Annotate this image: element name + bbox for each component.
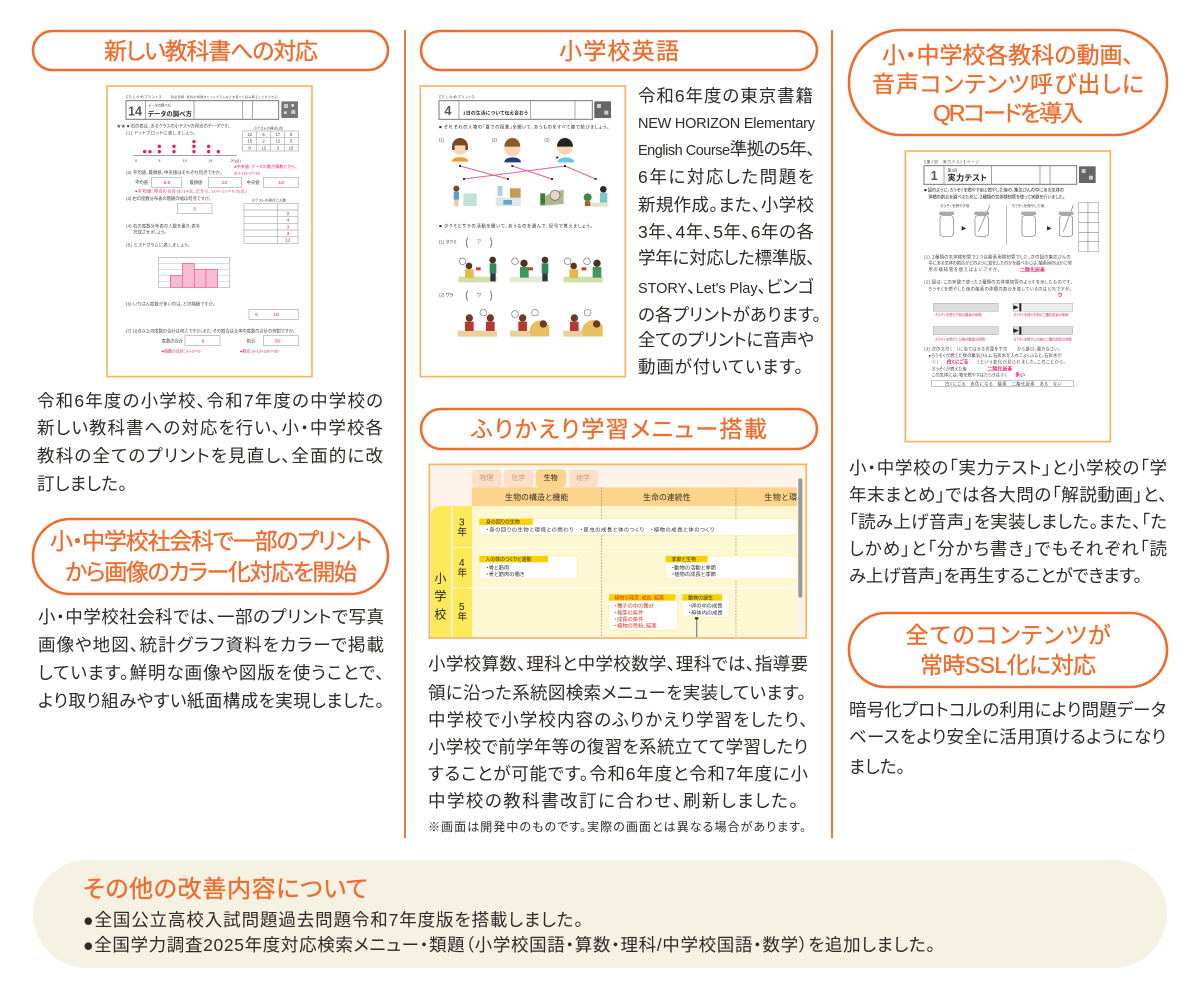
worksheet thumbnail: data reading: 15 — [289, 145, 294, 150]
worksheet thumbnail: achievement test: 白くにごる 赤色になる 酸素 二酸化炭素 ある ない — [945, 380, 1062, 387]
worksheet thumbnail: English: ■ タクミとサラの活動を聞いて、あうものを選んで、記号で答えましょう。 — [439, 222, 592, 229]
body text: video and audio QR: み上げ音声」を再生することができます。 — [849, 566, 1142, 586]
worksheet thumbnail: data reading: 到達目標：資料の特徴をヒストグラムなどを使って読み取ることができる。 — [171, 94, 280, 99]
worksheet thumbnail: data reading: 3 — [287, 231, 290, 237]
heading: video and audio QR: QRコードを導入 — [933, 100, 1083, 126]
worksheet thumbnail: data reading: 12 — [285, 238, 291, 244]
panel title: その他の改善内容について — [83, 876, 368, 903]
body text: new textbooks — [37, 391, 384, 494]
worksheet thumbnail: data reading: ●中央値：データの数が偶数だから、 — [234, 163, 297, 169]
worksheet thumbnail: data reading: 5 — [158, 159, 160, 163]
worksheet thumbnail: English: ア — [476, 239, 481, 245]
worksheet thumbnail: data reading: 17 — [275, 132, 281, 137]
tabs: 物理 — [479, 473, 493, 482]
body text: social studies colour — [38, 607, 384, 711]
worksheet thumbnail: English: ウ — [476, 292, 481, 299]
screenshot: curriculum map menu: ・骨と筋肉の働き — [486, 570, 525, 578]
screenshot: curriculum map menu: ・骨と筋肉 — [486, 563, 509, 571]
body text: English: 令和6年度の東京書籍 — [638, 86, 813, 106]
worksheet thumbnail: data reading: 10 — [278, 180, 284, 186]
worksheet thumbnail: data reading: 最頻値 — [189, 179, 203, 186]
worksheet thumbnail: data reading: 5 — [262, 132, 265, 137]
worksheet thumbnail: achievement test: ①（ — [932, 359, 939, 366]
body text: English: 新規作成。また、小学校 — [638, 195, 814, 215]
worksheet thumbnail: data reading: 3 — [287, 224, 290, 230]
worksheet thumbnail: achievement test: ウ — [1058, 292, 1063, 299]
body text: English: 動画が付いています。 — [638, 357, 803, 377]
heading: always-on SSL: 全てのコンテンツが — [906, 622, 1111, 648]
screenshot: curriculum map menu: ・動物の活動と季節 — [672, 563, 717, 571]
worksheet thumbnail: achievement test: 二酸化炭素 — [1020, 267, 1045, 274]
body text: English: English Course準拠の5年、 — [638, 139, 815, 159]
body text: English: NEW HORIZON Elementary — [638, 116, 816, 132]
worksheet thumbnail: achievement test: 白くにごる — [947, 359, 969, 366]
worksheet thumbnail: English: 4 — [444, 104, 451, 118]
worksheet thumbnail: achievement test: 第1回 — [948, 168, 957, 173]
tabs: 地学 — [576, 473, 590, 482]
tabs: 生物 — [544, 473, 558, 482]
worksheet thumbnail: English: (3) — [544, 137, 550, 142]
screenshot: curriculum map menu: ・成長の条件 — [614, 615, 644, 623]
screenshot: curriculum map menu: 生物と環 — [764, 492, 797, 502]
worksheet thumbnail: achievement test: 用の検知管を使えばよいですか。 — [928, 266, 1000, 273]
screenshot: curriculum map menu: 3 — [459, 517, 465, 528]
worksheet thumbnail: achievement test: ●ろうそくが燃えた後の集気びんに石灰水を入れてよくふると、石灰水が — [928, 352, 1062, 359]
heading: elementary English — [421, 31, 817, 70]
worksheet thumbnail: data reading: (8＋12)÷2＝10 — [234, 171, 261, 176]
worksheet thumbnail: achievement test: 1 — [931, 169, 938, 183]
worksheet thumbnail: achievement test: 多い — [1015, 372, 1025, 379]
body text: review menu: 領に沿った系統図検索メニューを実装しています。 — [428, 683, 806, 703]
worksheet thumbnail: data reading: 15 — [208, 159, 212, 163]
worksheet thumbnail: data reading: 20(点) — [231, 158, 241, 163]
worksheet thumbnail: data reading: 15 — [247, 139, 253, 144]
worksheet thumbnail: achievement test: 【第1回 実力テスト】ページ — [924, 159, 979, 164]
body text: video and audio QR: しかめ」と「分かち書き」でもそれぞれ「読 — [849, 539, 1167, 559]
worksheet thumbnail: data reading: ★★ ■ 右の表は、あるクラスの小テストの得点のデータです。 — [117, 123, 230, 130]
worksheet thumbnail: achievement test: 二酸化炭素 — [987, 365, 1012, 372]
worksheet thumbnail: data reading: 【たしかめプリント】 — [126, 94, 161, 99]
heading: new textbooks: 新しい教科書への対応 — [104, 38, 318, 64]
worksheet thumbnail: data reading: ●度数の合計：3＋3＝6 — [162, 347, 201, 353]
body text: review menu: することが可能です。令和6年度と令和7年度に小 — [428, 764, 808, 784]
worksheet thumbnail: achievement test: この気体には、物を燃やすはたらきは③（ — [931, 372, 1007, 379]
screenshot: curriculum map menu: 年 — [457, 567, 467, 579]
heading: social studies colour: から画像のカラー化対応を開始 — [65, 559, 357, 585]
worksheet thumbnail: achievement test: ろうそくを燃やす前の二酸化炭素の体積 — [1013, 312, 1069, 317]
heading: always-on SSL — [849, 613, 1167, 687]
worksheet thumbnail: data reading: 5 — [193, 206, 196, 212]
worksheet thumbnail: achievement test: 実力テスト — [948, 172, 987, 182]
body text: video and audio QR: 年末まとめ」では各大問の「解説動画」と、 — [849, 485, 1167, 505]
screenshot: curriculum map menu: 年 — [457, 526, 467, 538]
worksheet thumbnail: achievement test: ろうそくが燃えた後 — [931, 365, 968, 372]
body text: review menu — [428, 654, 808, 811]
worksheet thumbnail: data reading: 8 — [290, 132, 293, 137]
worksheet thumbnail: data reading: 9.5 — [163, 180, 170, 186]
worksheet thumbnail: achievement test: ろうそくを燃やした後 — [1011, 203, 1045, 208]
screenshot: curriculum map menu: ・植物の受粉、結実 — [614, 622, 657, 630]
body text: social studies colour: より取り組みやすい紙面構成を実現しました。 — [38, 691, 384, 711]
worksheet thumbnail: data reading: 5 — [255, 312, 258, 318]
screenshot: curriculum map menu: 小 — [434, 572, 446, 586]
body text: new textbooks: 令和6年度の小学校、令和7年度の中学校の — [37, 391, 383, 411]
worksheet thumbnail: achievement test: ろうそくを燃やす前 — [940, 203, 970, 208]
heading: review menu: ふりかえり学習メニュー搭載 — [470, 416, 767, 442]
worksheet thumbnail: achievement test: ■ 図のように、ろうそくを燃やす前と燃やした後の、集気びんの中にある気体の — [924, 187, 1064, 194]
worksheet thumbnail: data reading: 平均値 — [135, 179, 149, 186]
tabs: 化学 — [511, 473, 525, 482]
worksheet thumbnail: data reading: 小テストの得点(点) — [253, 125, 283, 130]
heading: review menu — [421, 409, 817, 449]
screenshot: curriculum map menu: ・卵の中の成長 — [688, 602, 723, 610]
body text: English: 3年、4年、5年、6年の各 — [638, 222, 814, 242]
worksheet thumbnail: data reading: 10 — [273, 312, 279, 318]
worksheet thumbnail: data reading: 12 — [275, 139, 281, 144]
body text: English: 学年に対応した標準版、 — [638, 248, 815, 268]
screenshot: curriculum map menu: 年 — [457, 611, 467, 623]
worksheet thumbnail: data reading: データの調べ方 — [148, 109, 193, 118]
body text: English — [638, 86, 821, 377]
bullet list: ●全国学力調査2025年度対応検索メニュー・類題（小学校国語・算数・理科/中学校国語・数学）を追加しました。 — [83, 935, 935, 955]
worksheet thumbnail: data reading: 50 — [275, 338, 281, 344]
screenshot: curriculum map menu: 動物の誕生 — [688, 594, 713, 601]
screenshot: curriculum map menu — [429, 464, 806, 638]
worksheet thumbnail: data reading: 完成させましょう。 — [133, 228, 166, 235]
body text: SSL: 暗号化プロトコルの利用により問題データ — [849, 700, 1166, 720]
worksheet thumbnail: achievement test: ）という変化が見られました。このことから、 — [977, 359, 1066, 366]
screenshot: curriculum map menu: 4 — [459, 558, 465, 569]
screenshot: curriculum map menu: 人の体のつくりと運動 — [485, 556, 532, 563]
worksheet thumbnail: achievement test: 中にある気体の割合がどのように変化したのかを調べるには、酸素用のほかに何 — [928, 259, 1072, 266]
heading: video and audio QR: 音声コンテンツ呼び出しに — [872, 71, 1144, 97]
body text: video and audio QR: 小・中学校の「実力テスト」と小学校の「学 — [849, 458, 1167, 478]
screenshot: curriculum map menu: 植物の発芽、成長、結実 — [614, 594, 664, 601]
note: screen disclaimer: ※画面は開発中のものです。実際の画面とは異なる場合があります。 — [428, 819, 806, 834]
panel: other improvements — [33, 860, 1167, 968]
worksheet thumbnail: data reading: 12 — [222, 180, 227, 186]
worksheet thumbnail: achievement test: ろうそくを燃やした後の二酸化炭素の体積 — [1013, 337, 1072, 342]
worksheet thumbnail: data reading: (5) ヒストグラムに表しましょう。 — [126, 241, 190, 248]
body text: review menu: 小学校で前学年等の復習を系統立てて学習したり — [428, 737, 808, 757]
worksheet thumbnail: data reading: 2 — [262, 139, 265, 144]
worksheet thumbnail: data reading: (1) ドットプロットに表しましょう。 — [126, 129, 195, 136]
bullet list — [83, 910, 935, 955]
worksheet thumbnail: achievement test: (1) ２種類の気体検知管で１つは酸素用検知管でした。次の図の集気びんの — [924, 253, 1071, 260]
body text: English: 6年に対応した問題を — [638, 167, 814, 187]
body text: new textbooks: 新しい教科書への対応を行い、小・中学校各 — [37, 418, 383, 438]
worksheet thumbnail: data reading: 12 — [261, 145, 267, 150]
body text: SSL — [849, 700, 1166, 777]
worksheet thumbnail: data reading: (4) 右の度数分布表の人数を書き、表を — [126, 222, 200, 229]
screenshot: curriculum map menu: ・発芽の条件 — [614, 608, 644, 616]
screenshot: curriculum map menu: ・植物の成長と季節 — [672, 570, 717, 578]
screenshot: curriculum map menu: ・身の回りの生物と環境との関わり ・昆虫の成長と体のつくり ・植物の成長と体のつくり — [486, 525, 715, 533]
body text: video and audio QR: 「読み上げ音声」を実装しました。また、「た — [849, 512, 1167, 532]
heading: social studies colour: 小・中学校社会科で一部のプリント — [50, 528, 372, 554]
screenshot: curriculum map menu: 身の回りの生物 — [486, 519, 520, 526]
worksheet thumbnail: data reading: 2 — [287, 211, 290, 217]
screenshot: curriculum map menu: 生物の構造と機能 — [505, 492, 568, 502]
worksheet thumbnail: data reading: 3 — [277, 145, 280, 150]
screenshot: curriculum map menu: 校 — [434, 608, 446, 622]
worksheet thumbnail: achievement test: (2) 図は、この実験で使った２種類の気体検知管のようすを示したものです。 — [924, 279, 1072, 286]
body text: review menu: 中学校の教科書改訂に合わせ、刷新しました。 — [428, 791, 798, 811]
heading: elementary English: 小学校英語 — [559, 38, 679, 64]
bullet list: ●全国公立高校入試問題過去問題令和7年度版を搭載しました。 — [83, 910, 583, 930]
screenshot: curriculum map menu: 季節と生物 — [672, 556, 696, 563]
worksheet thumbnail: data reading: データの調べ方 — [148, 102, 172, 107]
body text: English: 全てのプリントに音声や — [638, 330, 814, 350]
heading: video and audio QR: 小・中学校各教科の動画、 — [882, 42, 1134, 68]
body text: English: の各プリントがあります。 — [638, 305, 821, 325]
worksheet thumbnail: data reading: 4 — [287, 218, 290, 224]
worksheet thumbnail: achievement test — [905, 151, 1110, 442]
heading: always-on SSL: 常時SSL化に対応 — [920, 652, 1096, 678]
heading: video and audio QR — [849, 30, 1167, 135]
worksheet thumbnail: data reading: 割合 — [247, 337, 256, 344]
body text: social studies colour: 小・中学校社会科では、一部のプリントで写真 — [38, 607, 384, 627]
worksheet thumbnail: achievement test: ろうそくを燃やす前の酸素の体積 — [935, 312, 982, 317]
worksheet thumbnail: data reading: 度数の合計 — [162, 337, 184, 344]
worksheet thumbnail: data reading — [107, 86, 312, 377]
body text: review menu: 小学校算数、理科と中学校数学、理科では、指導要 — [428, 654, 808, 674]
body text: video and audio QR — [849, 458, 1167, 586]
body text: new textbooks: 教科の全てのプリントを見直し、全面的に改 — [37, 446, 384, 466]
worksheet thumbnail: data reading: ●平均値：得点の合計は114点、だから、114÷12＝9.5(点) — [135, 187, 247, 193]
worksheet thumbnail: data reading: 5 — [290, 139, 293, 144]
worksheet thumbnail: English: (1) — [439, 137, 445, 142]
body text: review menu: 中学校で小学校内容のふりかえり学習をしたり、 — [428, 710, 808, 730]
worksheet thumbnail: data reading: 小テストの得点と人数 — [252, 197, 286, 202]
worksheet thumbnail: data reading: 6 — [202, 338, 205, 344]
screenshot: curriculum map menu: 学 — [434, 588, 446, 603]
worksheet thumbnail: data reading: 14 — [128, 104, 142, 118]
worksheet thumbnail: achievement test: (3) 次の文の（ ）に当てはまる言葉を下の から選び、書きなさい。 — [924, 345, 1061, 352]
body text: SSL: ベースをより安全に活用頂けるようになり — [849, 727, 1166, 747]
heading: new textbooks — [33, 31, 388, 70]
worksheet thumbnail: achievement test: 体積の割合を調べるために、２種類の気体検知管を使って実験を行いました。 — [928, 194, 1065, 201]
worksheet thumbnail: achievement test: ろうそくを燃やした後の酸素の体積の割合を表しているのはどれですか。 — [928, 285, 1072, 292]
worksheet thumbnail: English: 【たしかめプリント】 — [439, 94, 474, 99]
worksheet thumbnail: achievement test: ろうそくを燃やした後の酸素の体積 — [935, 337, 986, 342]
worksheet thumbnail: English: ■ それぞれの人物の「夏での授業」を聞いて、あうものをすべて線で結びましょう。 — [439, 124, 609, 131]
tabs — [472, 469, 598, 487]
body text: new textbooks: 訂しました。 — [37, 474, 127, 494]
worksheet thumbnail: data reading: (3) 右の度数分布表の階級の幅は何点ですか。 — [126, 195, 211, 202]
body text: social studies colour: しています。鮮明な画像や図版を使うことで、 — [38, 663, 384, 683]
screenshot: curriculum map menu: ・種子の中の養分 — [614, 602, 655, 610]
body text: social studies colour: 画像や地図、統計グラフ資料をカラーで掲載 — [38, 635, 384, 655]
worksheet thumbnail: data reading: 中央値 — [247, 179, 260, 186]
worksheet thumbnail: data reading: ●割合：6÷12×100＝50 — [240, 347, 279, 353]
body text: English: STORY、Let's Play、ビンゴ — [638, 277, 814, 297]
worksheet thumbnail: English: 1日の生活について伝え合おう — [463, 109, 528, 116]
worksheet thumbnail: data reading: 10 — [183, 159, 187, 163]
worksheet thumbnail: English: (1) タクミ — [439, 238, 457, 245]
worksheet thumbnail: data reading: (7) 10点以上の度数の合計は何人ですか。また、その割合は全体の度数の合計の何割ですか。 — [126, 327, 295, 334]
worksheet thumbnail: data reading: 0 — [135, 159, 137, 163]
worksheet thumbnail: data reading: (6) いちばん度数が多いのは、どの階級ですか。 — [126, 301, 215, 308]
screenshot: curriculum map menu: 生命の連続性 — [643, 492, 691, 502]
worksheet thumbnail: English: (2) — [492, 137, 498, 142]
worksheet thumbnail: English — [420, 86, 625, 377]
worksheet thumbnail: data reading: (2) 平均値、最頻値、中央値はそれぞれ何点ですか。 — [126, 169, 222, 176]
screenshot: curriculum map menu: 5 — [459, 602, 465, 613]
body text: SSL: ました。 — [849, 757, 905, 777]
worksheet thumbnail: English: (2) サラ — [439, 293, 453, 299]
worksheet thumbnail: data reading: 12 — [247, 132, 253, 137]
worksheet thumbnail: data reading: 8 — [248, 145, 251, 150]
heading: social studies colour — [33, 519, 388, 594]
screenshot: curriculum map menu: ・母体内の成長 — [688, 608, 723, 616]
